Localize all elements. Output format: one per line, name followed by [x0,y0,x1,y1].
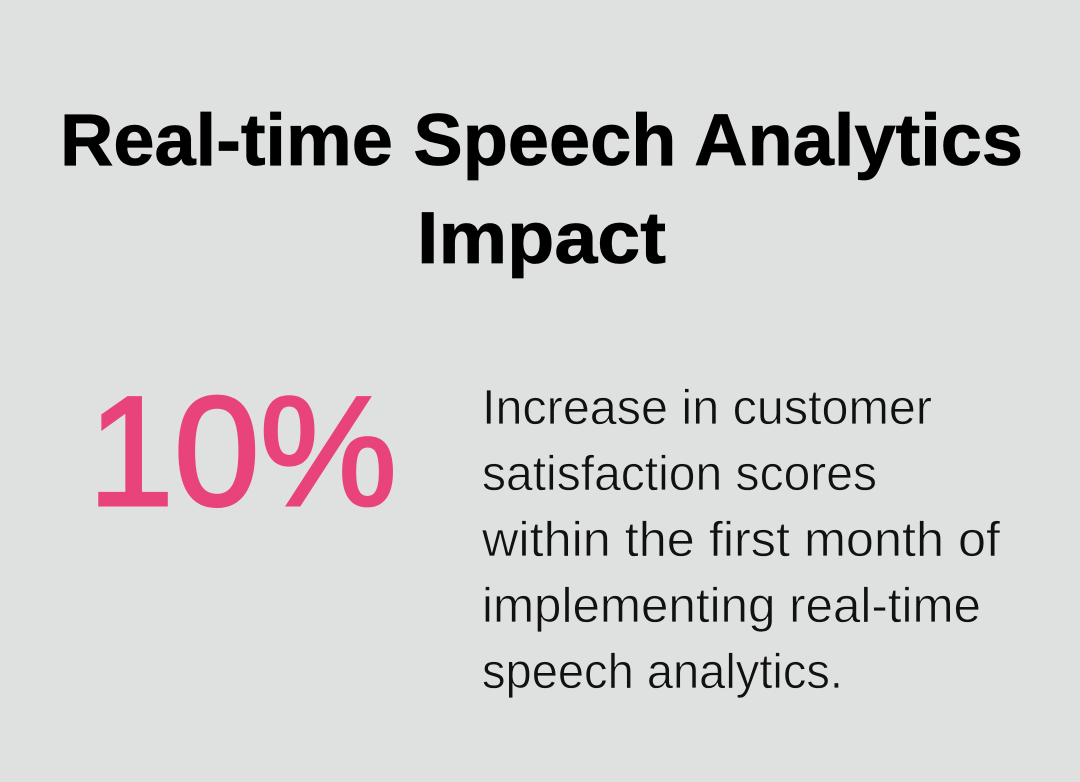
statistic: 10%: 10% [88,365,397,539]
description text: within the first month of [481,513,1000,567]
title: Impact [417,198,666,279]
description text [481,381,1000,699]
description text: implementing real-time [482,579,981,633]
description text: satisfaction scores [482,447,877,501]
description text: speech analytics. [482,645,843,699]
title: Real-time Speech Analytics [60,100,1023,181]
title [60,100,1023,279]
description text: Increase in customer [482,381,932,435]
